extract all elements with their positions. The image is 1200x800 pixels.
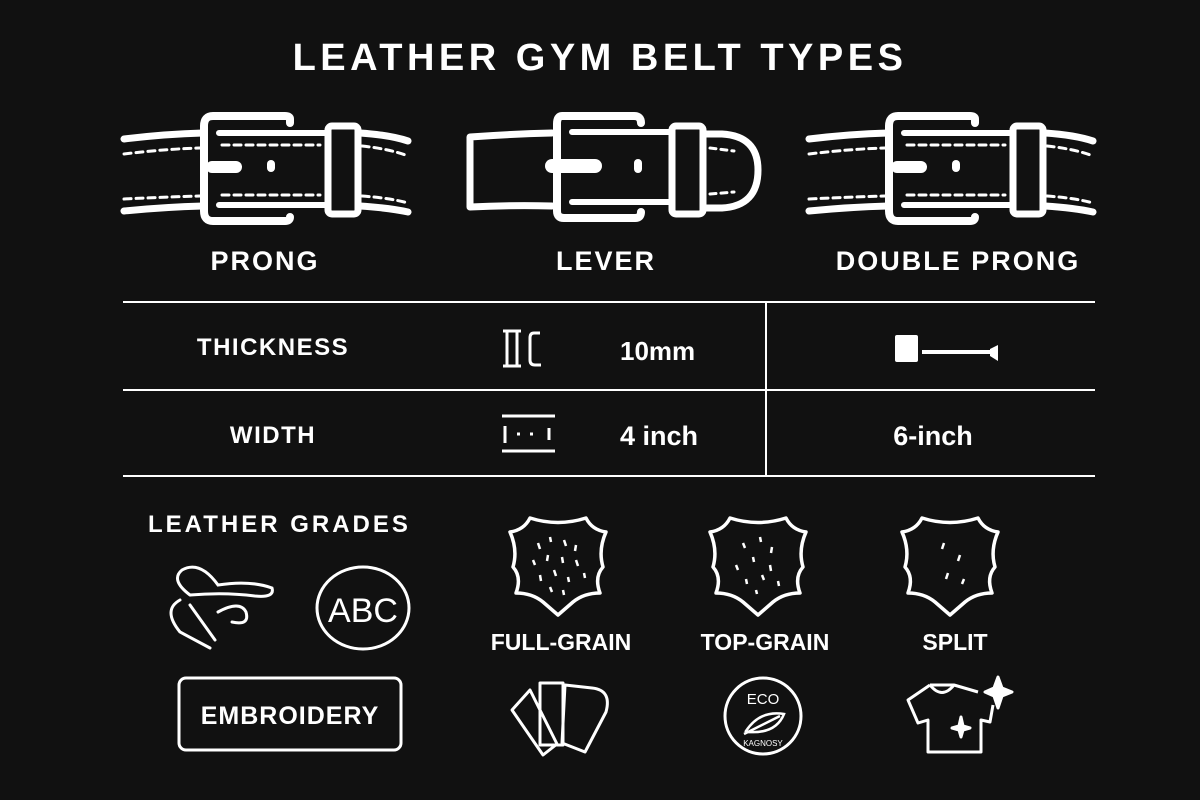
icon: ABC circle bbox=[317, 567, 409, 649]
row: width: WIDTH bbox=[230, 422, 316, 449]
icon: thickness bbox=[503, 331, 541, 366]
text: SPLIT bbox=[922, 629, 988, 655]
row: width: 4 inch bbox=[620, 421, 698, 451]
icon: eco badge bbox=[725, 678, 801, 754]
icon: swatch cards bbox=[512, 683, 607, 755]
label: double prong: DOUBLE PRONG bbox=[836, 246, 1080, 276]
embroidery box: EMBROIDERY bbox=[201, 702, 379, 730]
row: thickness: THICKNESS bbox=[197, 334, 349, 361]
row: width bbox=[230, 416, 973, 451]
text: TOP-GRAIN bbox=[701, 629, 829, 655]
text: FULL-GRAIN bbox=[491, 629, 631, 655]
icon: width bbox=[502, 416, 555, 451]
icon: double prong belt bbox=[809, 116, 1093, 221]
heading: leather grades: LEATHER GRADES bbox=[148, 511, 411, 538]
label: lever: LEVER bbox=[556, 246, 656, 276]
row: thickness bbox=[197, 331, 998, 366]
row: width: 6-inch bbox=[893, 421, 973, 451]
icon: thread/needle bbox=[171, 567, 272, 648]
icon: lever belt bbox=[470, 116, 758, 218]
hide: full-grain bbox=[510, 518, 606, 615]
hide: top-grain bbox=[710, 518, 806, 615]
icon: t-shirt sparkle bbox=[908, 677, 1012, 752]
embroidery box bbox=[179, 678, 401, 750]
icon: thickness bar bbox=[895, 335, 998, 362]
title: LEATHER GYM BELT TYPES bbox=[293, 37, 907, 79]
label: prong: PRONG bbox=[210, 246, 320, 276]
hide: split bbox=[902, 518, 998, 615]
row: thickness: 10mm bbox=[620, 336, 695, 366]
icon: prong belt bbox=[124, 116, 408, 221]
icon: eco badge: ECO bbox=[747, 691, 779, 708]
icon: eco badge: KAGNOSY bbox=[743, 739, 783, 748]
icon: ABC circle: ABC bbox=[328, 592, 398, 630]
